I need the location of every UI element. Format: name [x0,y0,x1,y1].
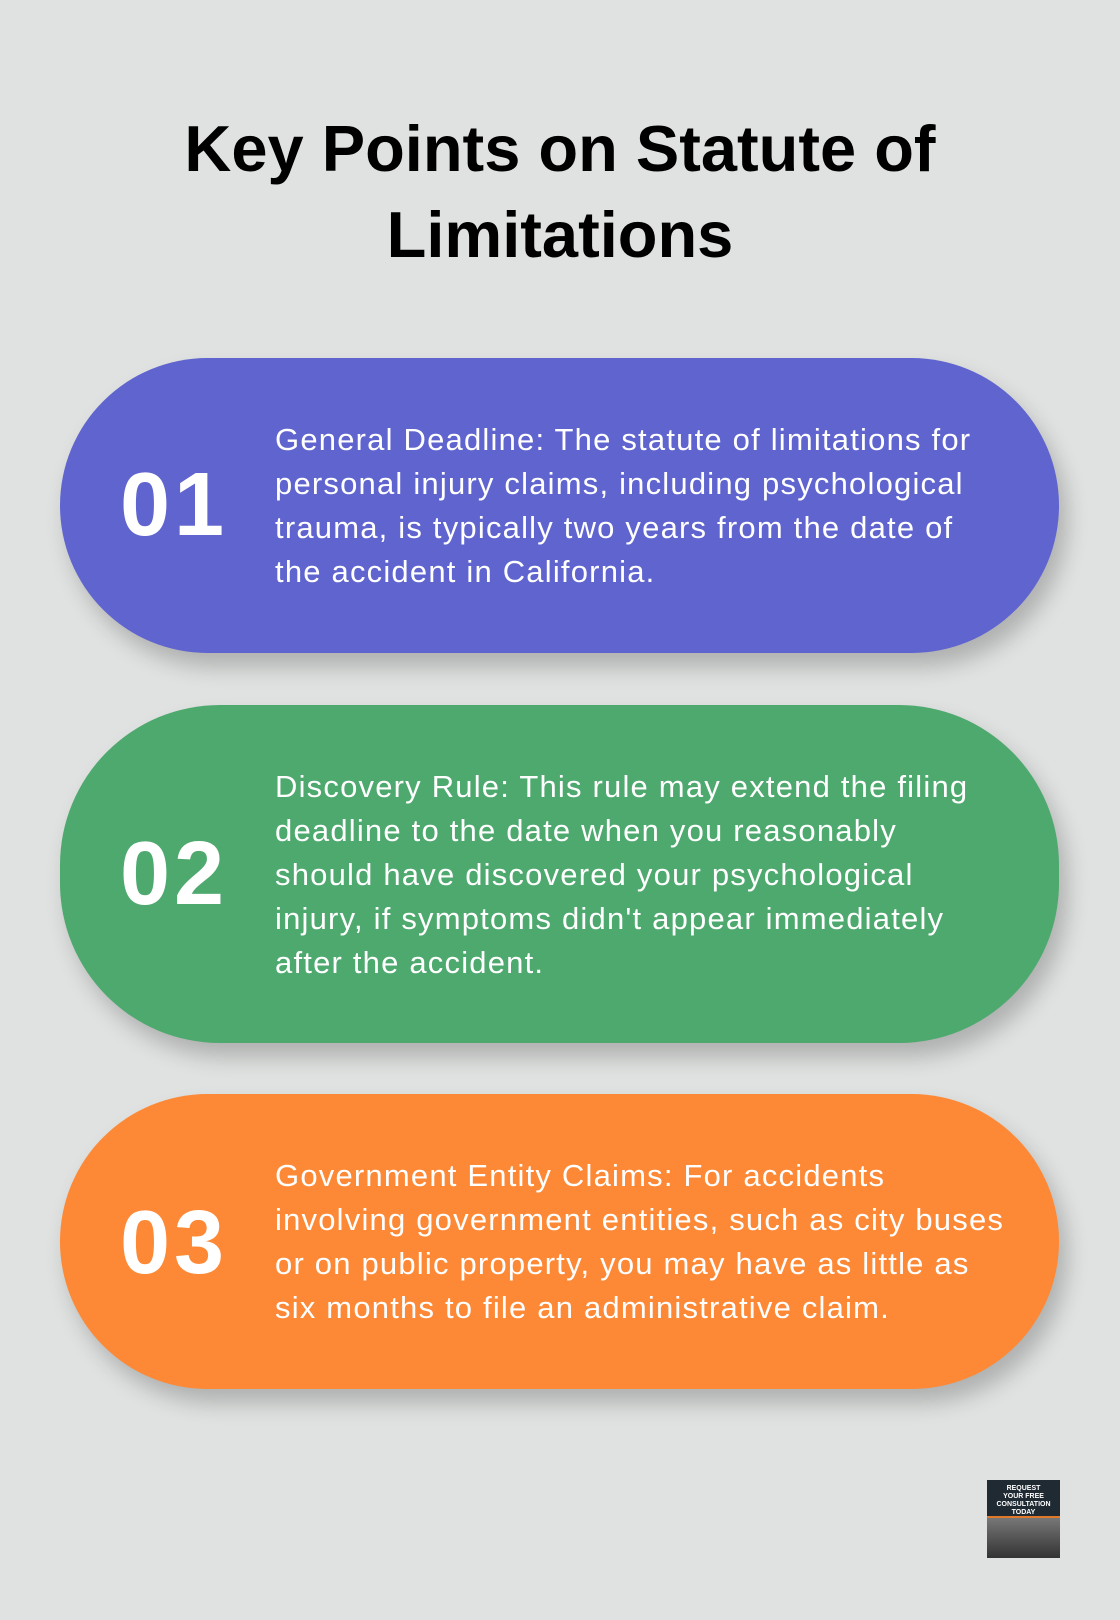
number 03: 03 [120,1193,228,1293]
text: government claims: Government Entity Claims: For accidents [275,1158,885,1193]
text: general deadline: General Deadline: The statute of limitations for [275,422,971,457]
title: Key Points on Statute of [184,112,936,185]
text: general deadline: the accident in California. [275,554,655,589]
text: discovery rule: Discovery Rule: This rule may extend the filing [275,769,968,804]
text: government claims [275,1158,1004,1325]
title: Limitations [387,198,733,271]
text: government claims: or on public property, you may have as little as [275,1246,970,1281]
text: discovery rule: should have discovered your psychological [275,857,914,892]
text: discovery rule [275,769,968,980]
text: discovery rule: deadline to the date when you reasonably [275,813,897,848]
number 02: 02 [120,824,228,924]
logo: consultation badge: TODAY [1012,1509,1035,1516]
text: general deadline: trauma, is typically two years from the date of [275,510,953,545]
logo: consultation badge: CONSULTATION [996,1501,1051,1508]
logo: consultation badge: REQUEST [1007,1485,1040,1492]
panel: 02 discovery rule [60,705,1059,1043]
text: government claims: six months to file an administrative claim. [275,1290,890,1325]
text: discovery rule: injury, if symptoms didn't appear immediately [275,901,944,936]
text: government claims: involving government entities, such as city buses [275,1202,1004,1237]
number 01: 01 [120,455,228,555]
logo: consultation badge [987,1480,1060,1558]
text: discovery rule: after the accident. [275,945,544,980]
text: general deadline: personal injury claims, including psychological [275,466,964,501]
text: general deadline [275,422,971,589]
panel: 01 general deadline [60,358,1059,653]
panel: 03 government entity claims [60,1094,1059,1389]
logo: consultation badge: YOUR FREE [1003,1493,1044,1500]
title [184,112,936,271]
